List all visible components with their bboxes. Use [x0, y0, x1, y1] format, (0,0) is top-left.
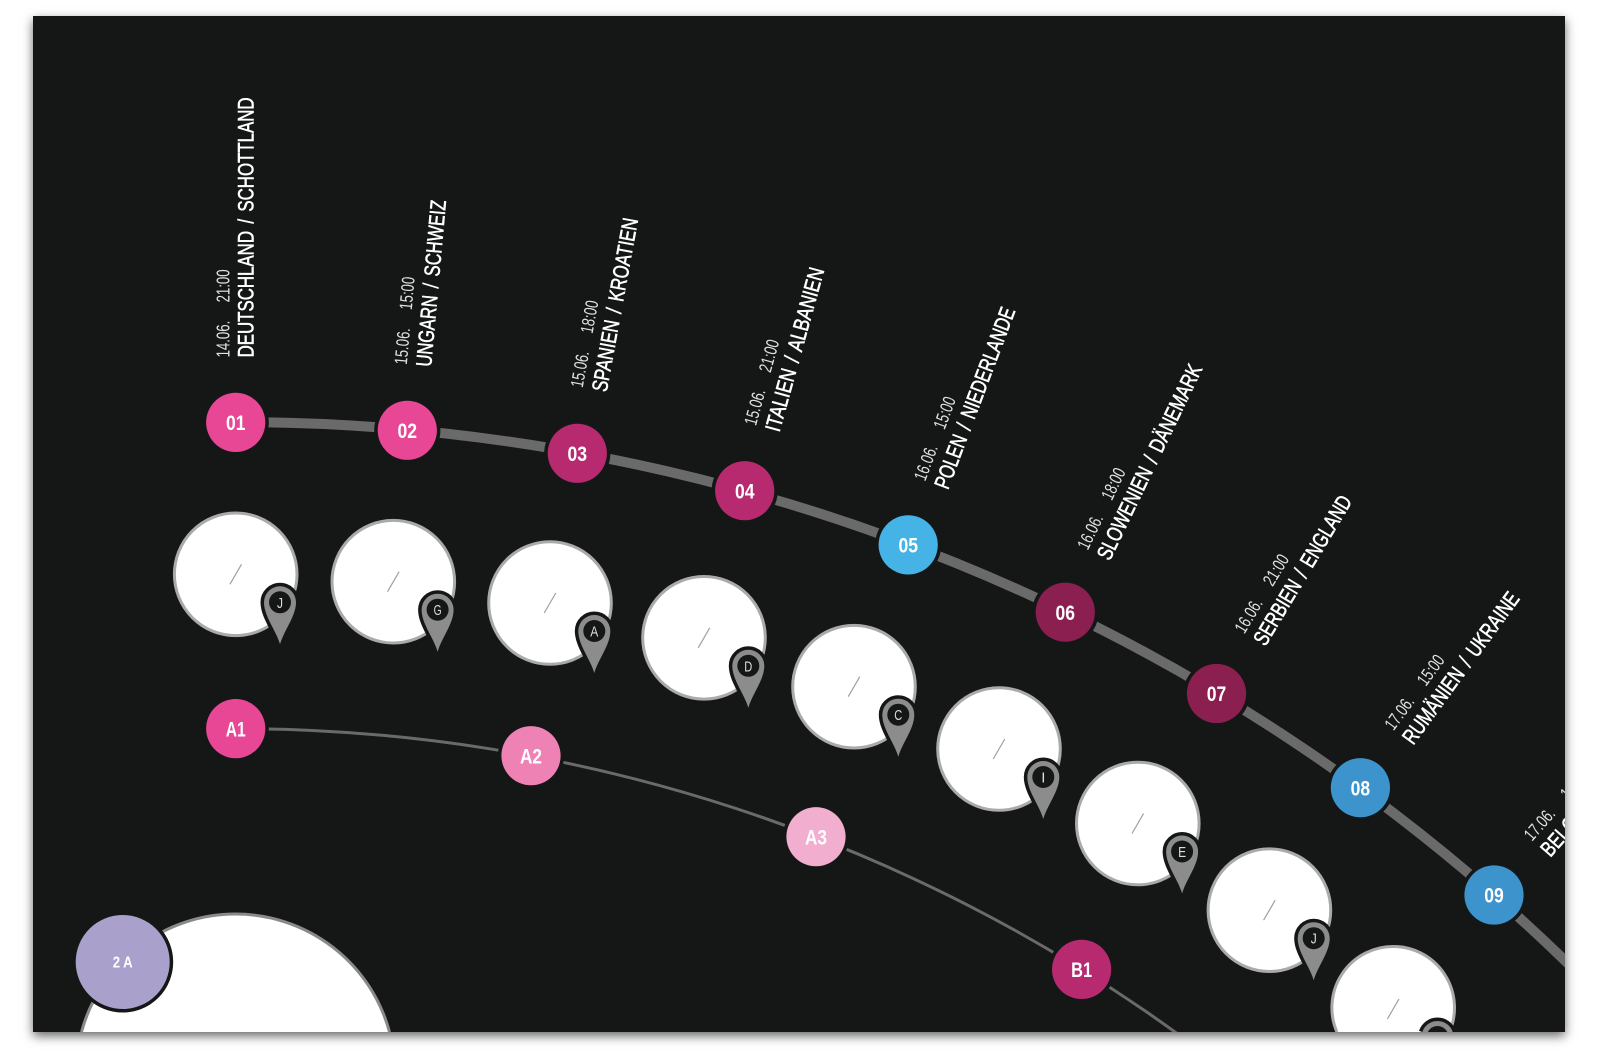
- node B1: [1052, 940, 1111, 999]
- label: match 03: SPANIEN / KROATIEN: [587, 216, 643, 393]
- label: match 06: SLOWENIEN / DÄNEMARK: [1092, 360, 1207, 564]
- node 06: [1036, 583, 1095, 642]
- disc: match 04, group D: [643, 576, 765, 708]
- label: match 01: 14.06. 21:00: [213, 269, 233, 357]
- label: match 06: [1073, 351, 1207, 564]
- disc: match 01, group J: J: [277, 595, 283, 612]
- timeline arc: group A to B rankings: [236, 729, 1183, 1038]
- disc: match 01, group J: [174, 513, 297, 644]
- node A1: A1: [226, 718, 246, 741]
- badge: group 2 A: 2 A: [113, 954, 133, 971]
- label: match 03: 15.06. 18:00: [567, 299, 602, 389]
- disc: match 07, group E: [1076, 762, 1199, 894]
- label: match 04: 15.06. 21:00: [740, 337, 783, 427]
- match labels: [213, 97, 1600, 861]
- node B1: B1: [1071, 959, 1092, 982]
- label: match 05: [910, 296, 1020, 492]
- disc: match 03, group A: [489, 542, 611, 673]
- disc: match 08, group J: [1208, 849, 1331, 980]
- disc: match 07, group E: E: [1178, 844, 1186, 861]
- disc: match 03, group A: A: [590, 624, 598, 640]
- label: match 02: 15.06. 15:00: [391, 276, 419, 365]
- node A1: [206, 699, 265, 758]
- node 06: 06: [1056, 602, 1075, 625]
- label: match 02: UNGARN / SCHWEIZ: [411, 199, 451, 368]
- label: match 08: 17.06. 15:00: [1381, 651, 1449, 734]
- node 04: 04: [735, 480, 755, 503]
- label: match 04: [740, 259, 829, 434]
- node 02: 02: [398, 420, 417, 443]
- badge: group 2 A: [76, 915, 170, 1009]
- label: match 07: SERBIEN / ENGLAND: [1248, 491, 1357, 650]
- node 05: [879, 515, 938, 575]
- node 03: [548, 424, 607, 483]
- node 02: [378, 401, 437, 460]
- node A2: [501, 726, 561, 785]
- label: match 01: [213, 97, 259, 357]
- node 09: [1464, 865, 1524, 925]
- label: match 03: [567, 212, 643, 393]
- node 07: [1187, 664, 1246, 723]
- node 09: 09: [1484, 885, 1504, 908]
- node 05: 05: [898, 535, 918, 558]
- label: match 01: DEUTSCHLAND / SCHOTTLAND: [234, 97, 259, 357]
- disc: match 04, group D: D: [744, 658, 752, 675]
- label: match 07: [1231, 480, 1357, 650]
- node 04: [715, 461, 774, 520]
- node A2: A2: [520, 745, 542, 768]
- node 08: 08: [1351, 777, 1370, 800]
- node 01: [206, 393, 265, 452]
- label: match 02: [391, 197, 451, 368]
- disc: match 02, group G: G: [434, 602, 442, 619]
- node 03: 03: [568, 443, 587, 466]
- node A3: A3: [805, 826, 827, 849]
- timeline arc: group stage matches: [236, 422, 1570, 966]
- label: match 06: 16.06. 18:00: [1073, 465, 1130, 553]
- node 07: 07: [1207, 683, 1226, 706]
- label: match 09: [1520, 698, 1600, 861]
- label: match 04: ITALIEN / ALBANIEN: [760, 265, 829, 434]
- disc: match 09, cut off by the panel edge: [1332, 946, 1454, 1046]
- label: match 05: POLEN / NIEDERLANDE: [929, 304, 1020, 492]
- score discs with venue pins: [174, 513, 1454, 1046]
- label: match 08: RUMÄNIEN / UKRAINE: [1397, 587, 1525, 749]
- match number nodes: [206, 393, 1524, 999]
- large group disc: [82, 914, 390, 1032]
- disc: match 02, group G: [332, 520, 455, 652]
- node 08: [1331, 758, 1390, 817]
- disc: match 05, group C: C: [894, 707, 902, 724]
- label: match 05: 16.06. 15:00: [910, 394, 960, 483]
- node 01: 01: [226, 412, 246, 435]
- label: match 08: [1381, 575, 1525, 749]
- node A3: [786, 807, 846, 866]
- disc: match 06, group I: [938, 688, 1060, 819]
- disc: match 08, group J: J: [1311, 931, 1317, 948]
- label: match 07: 16.06. 21:00: [1231, 551, 1293, 636]
- disc: match 05, group C: [793, 625, 915, 757]
- disc: match 06, group I: I: [1041, 770, 1045, 786]
